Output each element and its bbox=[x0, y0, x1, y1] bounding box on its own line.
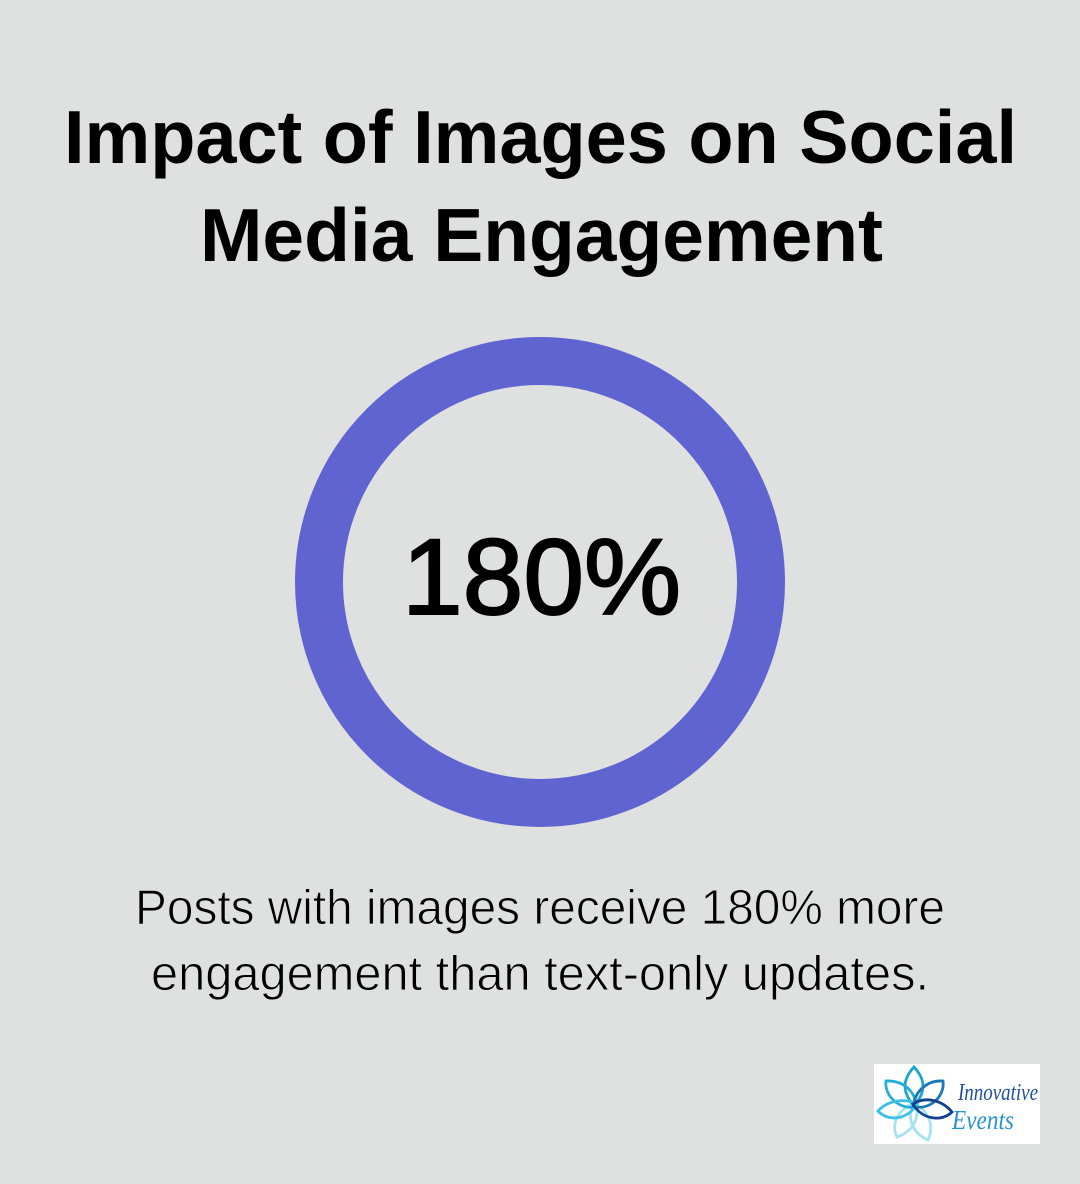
big number: 180% bbox=[402, 516, 681, 637]
title: Impact of Images on Social bbox=[64, 95, 1017, 179]
logo wordmark bbox=[951, 1080, 1038, 1135]
title bbox=[64, 95, 1017, 277]
title: Media Engagement bbox=[200, 193, 883, 277]
description: Posts with images receive 180% more bbox=[135, 881, 945, 935]
description bbox=[135, 881, 945, 1001]
description: engagement than text-only updates. bbox=[151, 947, 929, 1001]
logo wordmark: Innovative bbox=[957, 1080, 1038, 1106]
icon: flower bbox=[878, 1067, 952, 1140]
logo wordmark: Events bbox=[951, 1105, 1014, 1135]
logo: Innovative Events bbox=[874, 1064, 1040, 1144]
donut ring bbox=[319, 361, 761, 803]
